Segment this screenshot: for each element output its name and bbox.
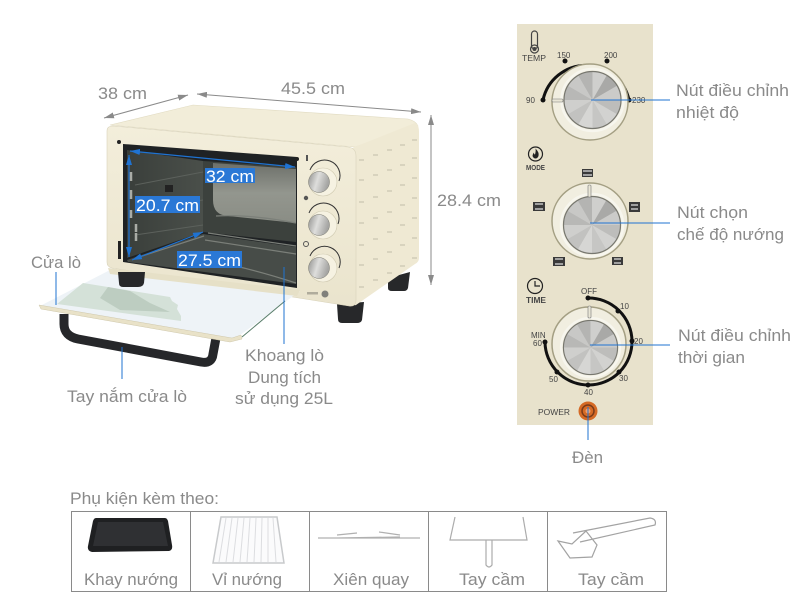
side vents bbox=[359, 140, 417, 287]
callout: mode knob: chế độ nướng bbox=[677, 225, 784, 244]
time dial scale: OFF bbox=[581, 287, 597, 296]
time icon bbox=[526, 278, 547, 305]
time dial scale: 30 bbox=[619, 374, 628, 383]
accessory: handle rack: Tay cầm bbox=[459, 570, 525, 589]
interior dimension: 27.5 cm bbox=[132, 232, 242, 270]
temperature dial scale: 230 bbox=[632, 96, 646, 105]
oven front panel bbox=[107, 126, 356, 306]
time dial scale: 20 bbox=[634, 337, 643, 346]
callout: temperature knob: Nút điều chỉnh bbox=[676, 81, 789, 100]
dimension: depth 38 cm bbox=[98, 84, 188, 118]
dimension: height 28.4 cm: 28.4 cm bbox=[437, 191, 501, 210]
callout: oven cavity: sử dụng 25L bbox=[235, 389, 333, 408]
callout: door: Cửa lò bbox=[31, 253, 81, 272]
temperature knob bbox=[552, 64, 628, 140]
dimension: width 45.5 cm bbox=[197, 79, 421, 112]
callout: door bbox=[31, 253, 81, 305]
accessory: rotisserie skewer: Xiên quay bbox=[333, 570, 409, 589]
callout: lamp bbox=[572, 407, 603, 467]
callout: mode knob: Nút chọn bbox=[677, 203, 748, 222]
time knob bbox=[552, 306, 626, 381]
accessories heading: Phụ kiện kèm theo: bbox=[70, 489, 219, 508]
callout: temperature knob bbox=[591, 81, 789, 122]
callout: door handle: Tay nắm cửa lò bbox=[67, 387, 187, 406]
callout: mode knob bbox=[590, 203, 784, 244]
cavity left wall bbox=[127, 150, 203, 258]
interior dimension: 20.7 cm: 20.7 cm bbox=[136, 196, 199, 215]
control panel close-up bbox=[517, 24, 653, 425]
panel background bbox=[517, 24, 653, 425]
table grid bbox=[72, 512, 666, 592]
dimension: width 45.5 cm: 45.5 cm bbox=[281, 79, 345, 98]
callout: oven cavity bbox=[235, 267, 333, 408]
callout: lamp: Đèn bbox=[572, 448, 603, 467]
accessory: wire rack: Vỉ nướng bbox=[212, 570, 282, 589]
temperature icon: TEMP bbox=[522, 54, 546, 63]
dimension: depth 38 cm: 38 cm bbox=[98, 84, 147, 103]
callout: time knob: Nút điều chỉnh bbox=[678, 326, 791, 345]
callout: temperature knob: nhiệt độ bbox=[676, 103, 739, 122]
mode icon bbox=[526, 147, 545, 172]
oven illustration bbox=[39, 105, 419, 362]
accessory: rotisserie skewer bbox=[318, 532, 420, 589]
interior dimension: 20.7 cm bbox=[129, 155, 200, 257]
temperature dial scale: 150 bbox=[557, 51, 571, 60]
power light bbox=[538, 402, 598, 420]
open glass door bbox=[39, 268, 300, 342]
mode icon: MODE bbox=[526, 165, 545, 172]
time dial scale: 40 bbox=[584, 388, 593, 397]
oven front foot seen through the door bbox=[118, 272, 145, 287]
callout: time knob: thời gian bbox=[678, 348, 745, 367]
time dial scale bbox=[531, 287, 643, 397]
oven cavity window bbox=[117, 140, 299, 288]
callout: oven cavity: Dung tích bbox=[248, 368, 321, 387]
temperature dial scale bbox=[526, 51, 646, 105]
accessory: handle rack bbox=[450, 517, 527, 589]
accessory: tongs handle bbox=[558, 518, 655, 589]
accessory: tongs handle: Tay cầm bbox=[578, 570, 644, 589]
oven rear feet bbox=[337, 272, 410, 323]
control knobs on oven bbox=[304, 155, 340, 298]
open door handle bbox=[64, 314, 216, 362]
temperature dial scale: 90 bbox=[526, 96, 535, 105]
callout: door handle bbox=[67, 347, 187, 406]
interior dimension: 32 cm bbox=[130, 151, 295, 186]
oven right side bbox=[352, 123, 419, 305]
accessory: baking tray bbox=[84, 518, 178, 589]
door frame bbox=[108, 268, 300, 296]
time dial scale: MIN bbox=[531, 331, 546, 340]
mode selector icons bbox=[533, 169, 640, 266]
cavity back wall lit area bbox=[213, 163, 296, 223]
interior dimension: 27.5 cm: 27.5 cm bbox=[178, 251, 241, 270]
callout: oven cavity: Khoang lò bbox=[245, 346, 324, 365]
interior dimension: 32 cm: 32 cm bbox=[206, 167, 254, 186]
door reflection bbox=[57, 283, 181, 321]
power light: POWER bbox=[538, 408, 570, 417]
callout: time knob bbox=[590, 326, 791, 367]
time dial scale: 50 bbox=[549, 375, 558, 384]
temperature dial scale: 200 bbox=[604, 51, 618, 60]
cavity back wall bbox=[203, 161, 296, 242]
temperature icon bbox=[522, 31, 546, 63]
time icon: TIME bbox=[526, 296, 547, 305]
time dial scale: 60 bbox=[533, 339, 542, 348]
mode knob bbox=[552, 183, 628, 259]
time dial scale: 10 bbox=[620, 302, 629, 311]
oven top bbox=[110, 105, 418, 147]
accessories table bbox=[72, 512, 666, 592]
cavity floor bbox=[127, 234, 296, 284]
accessory: wire rack bbox=[212, 517, 284, 589]
accessory: baking tray: Khay nướng bbox=[84, 570, 178, 589]
